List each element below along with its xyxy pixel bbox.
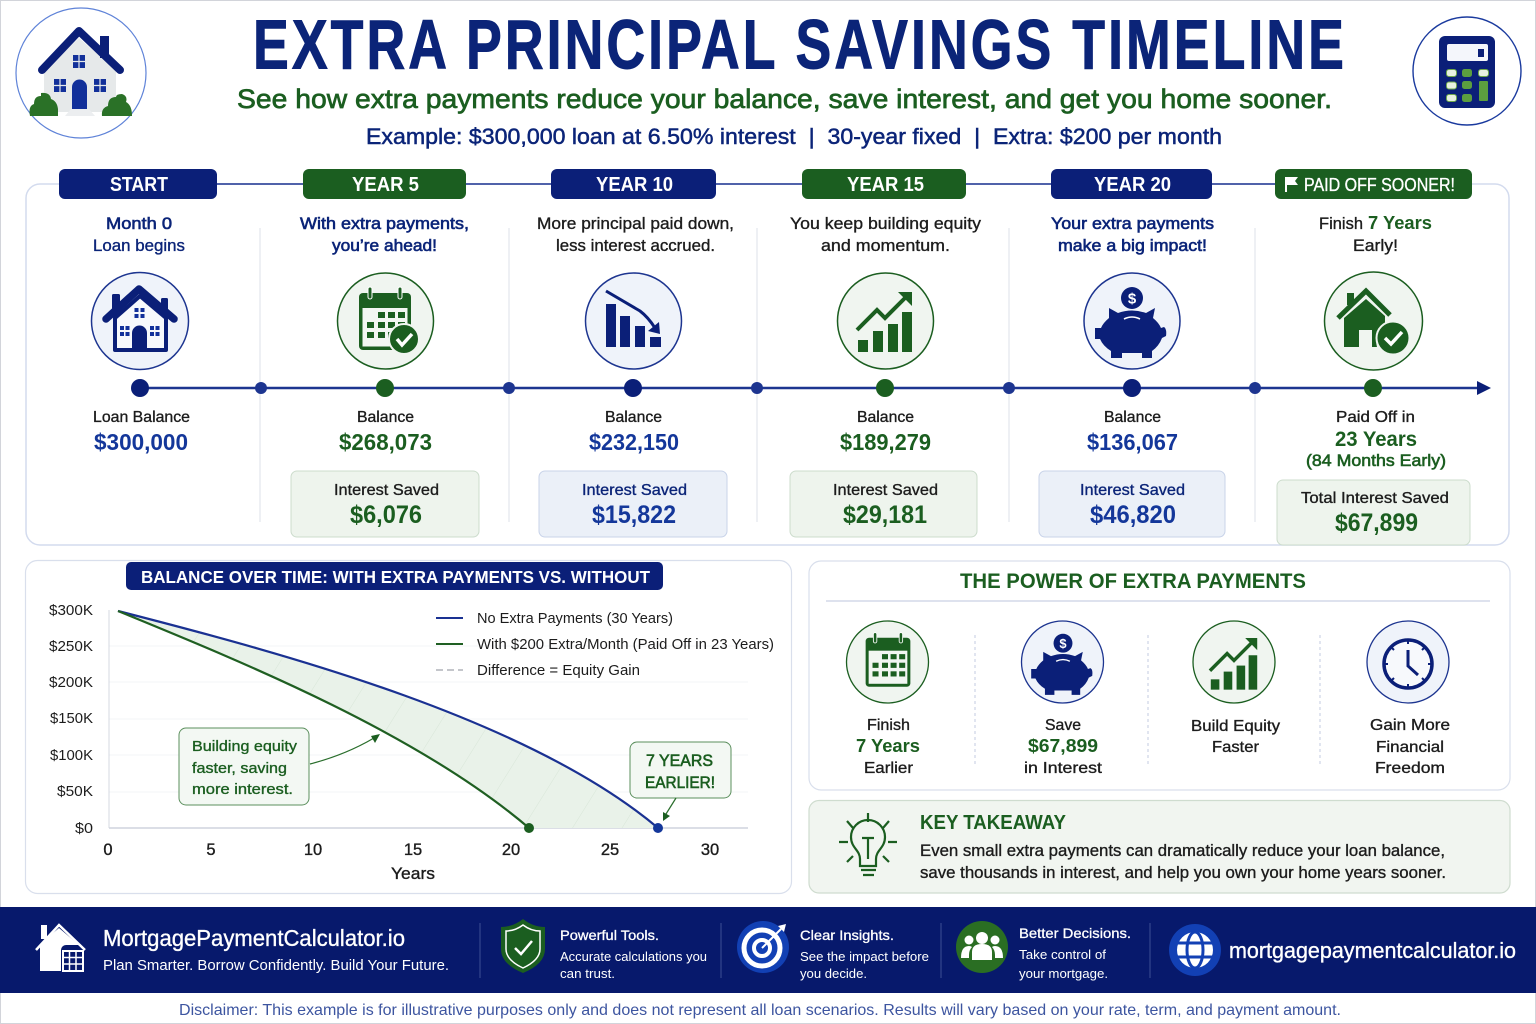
column: year 5: With extra payments, <box>300 215 469 233</box>
equity gain area <box>118 611 660 828</box>
footer item: clear insights <box>737 921 929 981</box>
benefit: financial freedom: Freedom <box>1375 760 1445 777</box>
line: with extra payments <box>118 611 534 833</box>
x axis: 5 <box>206 841 216 859</box>
callout: building equity: Building equity <box>192 738 298 755</box>
benefit: finish earlier: Earlier <box>864 760 914 777</box>
column: year 10: Interest Saved <box>582 482 687 499</box>
legend: No Extra Payments (30 Years) <box>477 611 673 627</box>
benefit: save interest: in Interest <box>1024 760 1103 777</box>
x axis <box>103 828 748 883</box>
column: year 20: $136,067 <box>1087 429 1178 455</box>
column: year 20: Interest Saved <box>1080 482 1185 499</box>
column: paid off sooner: $67,899 <box>1335 509 1418 537</box>
x axis: 0 <box>103 841 113 859</box>
column: year 15: and momentum. <box>821 237 950 255</box>
y axis: $50K <box>57 784 93 800</box>
column: year 10: YEAR 10 <box>596 174 673 196</box>
callout: building equity: faster, saving <box>192 760 287 777</box>
column: year 5: Balance <box>357 409 414 426</box>
column: start: Loan Balance <box>93 409 190 426</box>
footer item: clear insights: See the impact before <box>800 949 929 964</box>
footer item: clear insights: Clear Insights. <box>800 927 894 943</box>
example line: Example: $300,000 loan at 6.50% interest | 30-year fixed | Extra: $200 per month <box>366 124 1222 149</box>
icon: light bulb <box>839 813 897 875</box>
column: year 15: Interest Saved <box>833 482 938 499</box>
column: year 15: Balance <box>857 409 914 426</box>
footer item: better decisions: your mortgage. <box>1019 966 1108 981</box>
benefit: financial freedom <box>1367 621 1450 777</box>
benefit: financial freedom: Gain More <box>1370 717 1450 734</box>
column: paid off sooner: 7 Years <box>1368 213 1432 233</box>
column: year 10: More principal paid down, <box>537 215 734 233</box>
benefit: finish earlier <box>846 621 928 777</box>
column: year 5: YEAR 5 <box>352 174 419 196</box>
y axis <box>49 603 748 837</box>
legend: Difference = Equity Gain <box>477 663 640 679</box>
icon: calculator badge <box>1413 17 1521 125</box>
callout: building equity: more interest. <box>192 781 293 798</box>
column: year 5: Interest Saved <box>334 482 439 499</box>
legend <box>436 611 774 679</box>
footer item: powerful tools: Powerful Tools. <box>560 927 659 943</box>
benefit: save interest: $67,899 <box>1028 735 1098 756</box>
y axis: $300K <box>49 603 93 619</box>
column: year 10: Balance <box>605 409 662 426</box>
column: year 5: you’re ahead! <box>332 237 437 255</box>
footer item: website: mortgagepaymentcalculator.io <box>1229 938 1516 963</box>
panel: key takeaway <box>809 800 1510 893</box>
callout: 7 years earlier <box>630 742 731 821</box>
column: year 15: $189,279 <box>840 429 931 455</box>
column: paid off sooner: PAID OFF SOONER! <box>1304 175 1455 195</box>
y axis: $100K <box>50 748 93 764</box>
column: start: START <box>110 174 168 196</box>
benefit: save interest: Save <box>1045 717 1081 734</box>
column: year 10: less interest accrued. <box>556 237 715 255</box>
panel: key takeaway: Even small extra payments can dramatically reduce your loan balance, <box>920 842 1445 860</box>
footer item: clear insights: you decide. <box>800 966 867 981</box>
footer item: powerful tools <box>501 919 707 981</box>
column: year 15 <box>790 169 982 537</box>
callout: 7 years earlier: 7 YEARS <box>646 752 713 770</box>
logo: house badge <box>16 8 146 138</box>
panel: the power of extra payments <box>809 561 1510 790</box>
legend: With $200 Extra/Month (Paid Off in 23 Years) <box>477 637 774 653</box>
benefit: finish earlier: Finish <box>867 717 910 734</box>
subtitle: See how extra payments reduce your balance, save interest, and get you home sooner. <box>237 84 1332 114</box>
column: year 20: Your extra payments <box>1051 215 1214 233</box>
x axis: 20 <box>502 841 520 859</box>
column: year 10 <box>537 169 734 537</box>
benefit: build equity <box>1191 621 1280 756</box>
footer item: better decisions: Take control of <box>1019 947 1106 962</box>
footer brand text: MortgagePaymentCalculator.io <box>103 925 405 951</box>
column: start: $300,000 <box>94 429 188 455</box>
line: no extra payments <box>118 611 663 833</box>
column: paid off sooner: Finish <box>1319 214 1363 233</box>
column: year 20: Balance <box>1104 409 1161 426</box>
y axis: $150K <box>50 711 93 727</box>
callout: 7 years earlier: EARLIER! <box>645 774 715 792</box>
panel: balance over time chart <box>26 560 792 894</box>
panel: key takeaway: save thousands in interest, and help you own your home years sooner. <box>920 864 1446 882</box>
x axis: 10 <box>304 841 322 859</box>
column: year 20: YEAR 20 <box>1094 174 1171 196</box>
column: start <box>59 169 217 455</box>
column: paid off sooner: (84 Months Early) <box>1306 452 1446 470</box>
benefit: save interest <box>1022 621 1104 777</box>
callout: building equity <box>179 728 380 805</box>
footer item: powerful tools: Accurate calculations you <box>560 949 707 964</box>
footer item: better decisions: Better Decisions. <box>1019 925 1131 941</box>
footer brand text <box>103 925 449 974</box>
column: year 10: $232,150 <box>589 429 679 455</box>
column: paid off sooner: 23 Years <box>1335 428 1417 451</box>
footer logo icon <box>36 925 85 971</box>
y axis: $0 <box>75 821 93 837</box>
column: year 20: $46,820 <box>1090 501 1176 529</box>
column: paid off sooner: Paid Off in <box>1336 409 1415 426</box>
benefit: build equity: Faster <box>1212 739 1260 756</box>
y axis: $200K <box>49 675 93 691</box>
column: year 15: You keep building equity <box>790 215 982 233</box>
column: year 15: YEAR 15 <box>847 174 924 196</box>
panel: key takeaway: KEY TAKEAWAY <box>920 812 1067 834</box>
column: paid off sooner: Total Interest Saved <box>1301 490 1449 507</box>
column: start: Month 0 <box>106 215 172 233</box>
disclaimer: Disclaimer: This example is for illustrative purposes only and does not represent all loan scenarios. Results will vary based on your rate, term, and payment amount. <box>179 1002 1341 1019</box>
column: paid off sooner <box>1275 169 1472 545</box>
chart heading: BALANCE OVER TIME: WITH EXTRA PAYMENTS VS. WITHOUT <box>141 567 650 587</box>
chart heading <box>126 562 663 590</box>
column: start: Loan begins <box>93 237 185 255</box>
column: year 5 <box>291 169 479 537</box>
footer item: better decisions <box>956 921 1131 981</box>
benefit: build equity: Build Equity <box>1191 718 1280 735</box>
x axis: Years <box>391 865 435 883</box>
panel heading: THE POWER OF EXTRA PAYMENTS <box>960 569 1306 593</box>
y axis: $250K <box>49 639 93 655</box>
header connector line <box>217 183 1275 185</box>
column: year 5: $268,073 <box>339 429 432 455</box>
column: paid off sooner: Early! <box>1353 237 1398 255</box>
x axis: 25 <box>601 841 619 859</box>
footer item: powerful tools: can trust. <box>560 966 615 981</box>
timeline axis arrow <box>131 379 1491 397</box>
footer band <box>0 907 1536 993</box>
column: year 5: $6,076 <box>350 501 422 529</box>
column: year 20: make a big impact! <box>1058 237 1207 255</box>
footer brand text: Plan Smarter. Borrow Confidently. Build Your Future. <box>103 957 449 974</box>
benefit: financial freedom: Financial <box>1376 739 1444 756</box>
x axis: 15 <box>404 841 422 859</box>
panel: timeline <box>26 169 1509 545</box>
footer item: website <box>1169 924 1516 976</box>
benefit: finish earlier: 7 Years <box>856 735 920 756</box>
x axis: 30 <box>701 841 719 859</box>
column: year 20 <box>1039 169 1225 537</box>
column: year 15: $29,181 <box>843 501 927 529</box>
column: year 10: $15,822 <box>592 501 676 529</box>
